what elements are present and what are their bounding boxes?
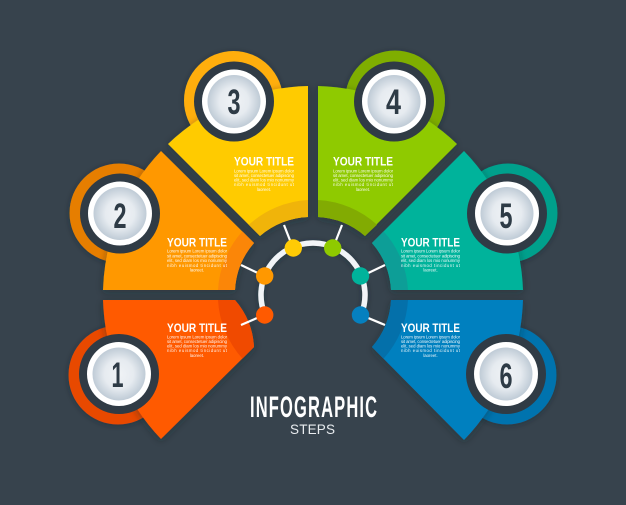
wedge 1 xyxy=(103,300,254,439)
text 3: elit, sed diam los mio nonummy xyxy=(234,177,295,182)
ring 6 xyxy=(458,326,556,424)
wedge 5 xyxy=(372,151,523,290)
connector ring xyxy=(241,225,385,325)
text 1: Lorem ipsum Lorem ipsum dolor xyxy=(167,334,228,339)
text 4 xyxy=(333,156,394,192)
ring 4 xyxy=(345,50,445,150)
text 6: elit, sed diam los mio nonummy xyxy=(401,344,461,348)
panel: step 6 xyxy=(372,300,556,440)
text 2: sit amet, consectetuer adipiscing xyxy=(167,253,228,258)
text 6: laoreet. xyxy=(423,353,438,358)
panel: step 1 xyxy=(68,300,254,439)
text 6: YOUR TITLE xyxy=(401,323,460,335)
wedge 6 xyxy=(372,300,523,440)
text 1: laoreet. xyxy=(190,353,204,358)
node 5 xyxy=(352,267,369,285)
node 1 xyxy=(256,306,273,324)
panel: step 5 xyxy=(372,151,558,290)
wedge 2 xyxy=(103,151,254,290)
text 2: Lorem ipsum Lorem ipsum dolor xyxy=(167,249,228,254)
text 3: nibh euismod tincidunt ut xyxy=(234,182,295,187)
text 6: Lorem ipsum Lorem ipsum dolor xyxy=(401,334,461,339)
ring 3 xyxy=(184,51,283,150)
badge 6 xyxy=(466,334,546,414)
badge 2 xyxy=(80,174,160,254)
badge 3 xyxy=(194,62,274,142)
badge 6: 6 xyxy=(500,357,512,396)
text 1: sit amet, consectetuer adipiscing xyxy=(167,339,228,344)
node 4 xyxy=(324,239,341,257)
badge 5 xyxy=(467,174,547,254)
wedge 1 inner band xyxy=(218,300,254,359)
badge 1: 1 xyxy=(112,356,124,395)
text 5: laoreet. xyxy=(423,268,438,273)
title: STEPS xyxy=(290,422,335,437)
text 2: elit, sed diam los mio nonummy xyxy=(167,258,228,263)
text 4: YOUR TITLE xyxy=(333,156,393,168)
wedge 5 inner band xyxy=(372,231,408,290)
badge 4: 4 xyxy=(386,83,401,122)
text 3: sit amet, consectetuer adipiscing xyxy=(234,173,295,178)
panel: step 2 xyxy=(70,151,254,290)
text 1: elit, sed diam los mio nonummy xyxy=(167,344,228,348)
text 5: YOUR TITLE xyxy=(401,238,460,250)
text 5: sit amet, consectetuer adipiscing xyxy=(401,253,461,258)
text 6: sit amet, consectetuer adipiscing xyxy=(401,339,461,344)
text 1 xyxy=(167,323,228,358)
badge 2: 2 xyxy=(114,197,126,236)
text 5: nibh euismod tincidunt ut xyxy=(401,263,461,268)
text 4: laoreet. xyxy=(356,187,370,192)
text 4: elit, sed diam los mio nonummy xyxy=(333,177,394,182)
title: INFOGRAPHIC xyxy=(250,391,377,424)
text 3 xyxy=(234,156,295,192)
wedge 3 inner band xyxy=(249,200,308,236)
text 3: YOUR TITLE xyxy=(234,156,294,168)
text 5: elit, sed diam los mio nonummy xyxy=(401,258,461,263)
text 3: Lorem ipsum Lorem ipsum dolor xyxy=(234,168,295,173)
badge 1 xyxy=(79,334,159,414)
text 5 xyxy=(401,238,461,273)
text 2: YOUR TITLE xyxy=(167,238,227,250)
text 4: sit amet, consectetuer adipiscing xyxy=(333,173,394,178)
panel: step 4 xyxy=(318,50,457,236)
node 2 xyxy=(256,267,273,285)
ring 2 xyxy=(70,164,168,262)
wedge 2 inner band xyxy=(218,231,254,290)
text 6: nibh euismod tincidunt ut xyxy=(401,348,461,353)
text 4: Lorem ipsum Lorem ipsum dolor xyxy=(333,168,394,173)
text 6 xyxy=(401,323,461,358)
text 5: Lorem ipsum Lorem ipsum dolor xyxy=(401,249,461,254)
text 2: laoreet. xyxy=(190,268,204,273)
text 4: nibh euismod tincidunt ut xyxy=(333,182,394,187)
text 1: YOUR TITLE xyxy=(167,323,227,335)
ring 1 xyxy=(68,326,168,424)
text 1: nibh euismod tincidunt ut xyxy=(167,348,228,353)
badge 5: 5 xyxy=(500,197,512,236)
node 3 xyxy=(285,239,302,257)
wedge 3 xyxy=(168,86,308,236)
wedge 6 inner band xyxy=(372,300,408,359)
badge 4 xyxy=(354,62,434,142)
ring 5 xyxy=(458,164,558,262)
node 6 xyxy=(352,306,369,324)
wedge 4 inner band xyxy=(318,200,377,236)
badge 3: 3 xyxy=(228,83,240,122)
wedge 4 xyxy=(318,86,457,236)
text 3: laoreet. xyxy=(257,187,271,192)
panel: step 3 xyxy=(168,51,308,236)
text 2: nibh euismod tincidunt ut xyxy=(167,263,228,268)
text 2 xyxy=(167,238,228,273)
